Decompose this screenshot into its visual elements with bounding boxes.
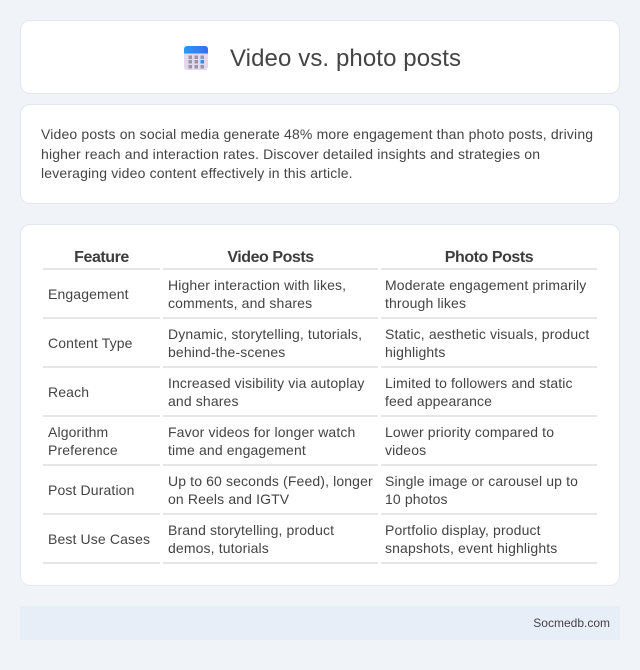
duration video: on Reels and IGTV bbox=[168, 491, 289, 507]
row: best use cases: Best Use Cases bbox=[48, 531, 150, 547]
footer bar bbox=[20, 606, 620, 640]
use cases photo: snapshots, event highlights bbox=[385, 540, 557, 556]
table header: video posts: Video Posts bbox=[227, 249, 314, 266]
algorithm video bbox=[168, 424, 355, 458]
reach video: Increased visibility via autoplay bbox=[168, 375, 364, 391]
panel: title card bbox=[20, 20, 620, 94]
table header: photo posts: Photo Posts bbox=[445, 249, 533, 266]
duration photo: 10 photos bbox=[385, 491, 448, 507]
use cases photo bbox=[385, 522, 557, 556]
content type photo bbox=[385, 326, 590, 360]
use cases video: demos, tutorials bbox=[168, 540, 269, 556]
intro paragraph: Video posts on social media generate 48% more engagement than photo posts, driving bbox=[41, 126, 593, 142]
content type photo: highlights bbox=[385, 344, 445, 360]
reach photo bbox=[385, 375, 573, 409]
content type video: behind-the-scenes bbox=[168, 344, 285, 360]
engagement video: Higher interaction with likes, bbox=[168, 277, 346, 293]
row: algorithm preference bbox=[48, 424, 118, 458]
algorithm photo bbox=[385, 424, 554, 458]
engagement photo: Moderate engagement primarily bbox=[385, 277, 586, 293]
intro paragraph bbox=[41, 126, 593, 181]
reach photo: Limited to followers and static bbox=[385, 375, 573, 391]
row: algorithm preference: Preference bbox=[48, 442, 118, 458]
engagement video bbox=[168, 277, 346, 311]
content type video: Dynamic, storytelling, tutorials, bbox=[168, 326, 362, 342]
content type video bbox=[168, 326, 362, 360]
title: Video vs. photo posts bbox=[230, 45, 461, 72]
reach video: and shares bbox=[168, 393, 239, 409]
duration photo bbox=[385, 473, 578, 507]
use cases video bbox=[168, 522, 334, 556]
use cases photo: Portfolio display, product bbox=[385, 522, 541, 538]
engagement photo: through likes bbox=[385, 295, 466, 311]
duration video: Up to 60 seconds (Feed), longer bbox=[168, 473, 373, 489]
engagement video: comments, and shares bbox=[168, 295, 312, 311]
content type photo: Static, aesthetic visuals, product bbox=[385, 326, 589, 342]
duration video bbox=[168, 473, 373, 507]
engagement photo bbox=[385, 277, 586, 311]
intro paragraph: higher reach and interaction rates. Discover detailed insights and strategies on bbox=[41, 146, 540, 162]
reach video bbox=[168, 375, 364, 409]
use cases video: Brand storytelling, product bbox=[168, 522, 334, 538]
duration photo: Single image or carousel up to bbox=[385, 473, 578, 489]
row: post duration: Post Duration bbox=[48, 482, 135, 498]
panel: intro text bbox=[20, 104, 620, 204]
row: reach: Reach bbox=[48, 384, 89, 400]
algorithm video: Favor videos for longer watch bbox=[168, 424, 355, 440]
table header: feature: Feature bbox=[74, 249, 129, 266]
icon: calendar bbox=[184, 46, 208, 70]
algorithm photo: Lower priority compared to bbox=[385, 424, 554, 440]
footer source: Socmedb.com bbox=[533, 616, 610, 630]
row: algorithm preference: Algorithm bbox=[48, 424, 108, 440]
panel: comparison table bbox=[20, 224, 620, 586]
row: content type: Content Type bbox=[48, 335, 133, 351]
row: engagement: Engagement bbox=[48, 286, 129, 302]
intro paragraph: leveraging video content effectively in this article. bbox=[41, 165, 353, 181]
algorithm video: time and engagement bbox=[168, 442, 306, 458]
algorithm photo: videos bbox=[385, 442, 426, 458]
reach photo: feed appearance bbox=[385, 393, 492, 409]
